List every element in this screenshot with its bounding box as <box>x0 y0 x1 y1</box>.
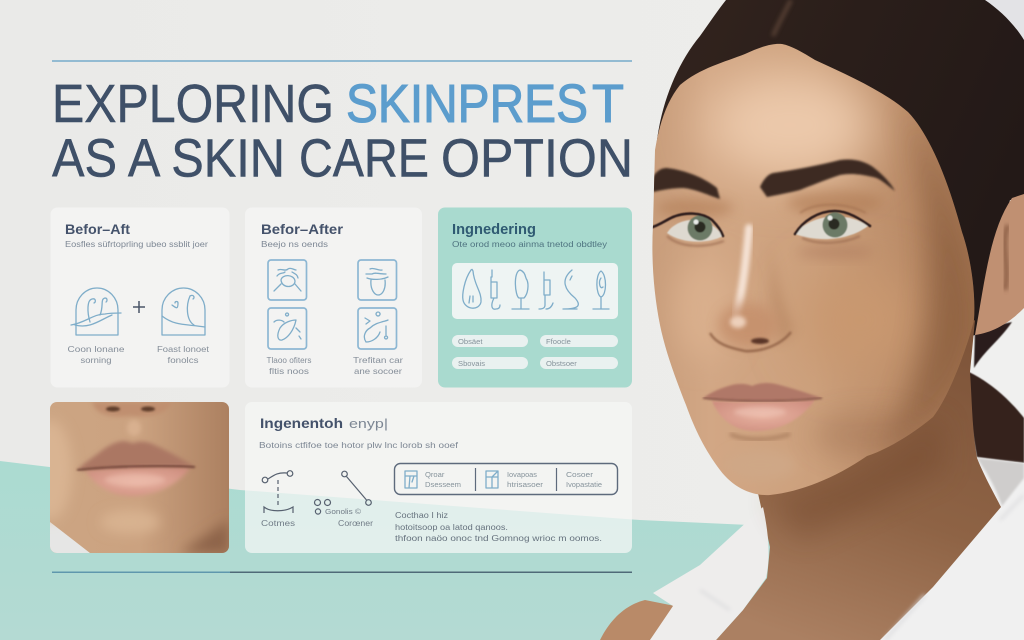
strip text 2 <box>507 470 544 489</box>
shirt back collar shade <box>977 458 1024 506</box>
ingredient pill 3 <box>452 357 528 369</box>
left eyebrow <box>650 168 720 199</box>
strip text 1: Dsesseem <box>425 480 461 489</box>
panel 3 heading: Ingnedering <box>452 221 536 238</box>
photo: lips close-up <box>50 402 229 553</box>
title: SKINPRES <box>346 75 588 134</box>
right cheek <box>818 299 912 342</box>
caption left: Coon lonane <box>68 344 125 354</box>
bottom rule <box>52 572 632 573</box>
panel 5 paragraph: Cocthao I hiz <box>395 510 448 520</box>
panel 5 subtitle: Botoins ctfifoe toe hotor plw lnc lorob sh ooef <box>259 440 459 450</box>
caption left: Tlaoo ofiters <box>266 355 312 365</box>
mouth <box>703 383 822 439</box>
outlined info strip <box>394 464 618 494</box>
title: AS A SKIN <box>52 130 285 188</box>
panel: ingredients <box>438 208 632 388</box>
right eye <box>795 205 870 243</box>
ear detail <box>1005 225 1008 290</box>
chin <box>724 449 796 481</box>
right eyebrow <box>760 159 895 197</box>
ingredient pill 1 <box>452 335 528 347</box>
strip text 3 <box>566 470 602 489</box>
panel 1 heading: Befor–Aft <box>65 221 130 237</box>
strip text 2: htrisasoer <box>507 480 544 489</box>
panel: ingredient summary <box>245 402 632 553</box>
hair under ear <box>974 322 1012 368</box>
diagram: left connector: Cotmes <box>261 518 295 528</box>
panel 2 heading: Befor–After <box>261 221 344 237</box>
title <box>52 75 633 188</box>
hair <box>655 0 1024 340</box>
panel: before-after 1 <box>50 208 230 388</box>
caption left: fltis noos <box>269 366 309 376</box>
temple shadow <box>887 137 974 446</box>
icon: bottom-right tile <box>358 308 396 349</box>
caption right: Foast lonoet <box>157 344 210 354</box>
eye socket shadow right <box>787 191 883 215</box>
strip icon 2 <box>486 471 498 488</box>
caption right <box>353 355 403 376</box>
forehead highlight <box>705 70 875 180</box>
title: OPTION <box>441 130 633 188</box>
strip text 1 <box>425 470 461 489</box>
neck shadow <box>770 415 945 540</box>
caption right: fonolcs <box>168 355 198 365</box>
nose bridge highlight <box>736 228 749 316</box>
ingredient pill 3: Sbovais <box>458 359 485 368</box>
strip icon 1 <box>405 471 417 488</box>
strip text 1: Qroar <box>425 470 445 479</box>
ingredient pill 4 <box>540 357 618 369</box>
ponytail <box>969 372 1024 463</box>
top right corner backdrop <box>985 0 1024 40</box>
panel 5 heading: Ingenentoh <box>260 415 343 431</box>
under eye shadow right <box>803 244 862 260</box>
caption left <box>68 344 125 365</box>
panel 5 paragraph: hotoitsoop oa latod qanoos. <box>395 522 508 532</box>
nose tip <box>710 303 791 351</box>
ingredient icon strip <box>452 263 618 319</box>
caption right: Trefitan car <box>353 355 403 365</box>
shoulder <box>600 600 675 640</box>
portrait photo <box>600 0 1024 640</box>
shirt base <box>850 458 1024 640</box>
caption right <box>157 344 210 365</box>
icon: skin arch right <box>162 288 205 335</box>
face <box>652 44 974 496</box>
right side backdrop <box>970 330 1024 460</box>
strip text 3: Ivopastatie <box>566 480 602 489</box>
icon: top-left tile <box>268 260 306 300</box>
diagram: right connector: Gonolis © <box>325 507 361 516</box>
left eye <box>650 214 724 246</box>
panel 2 subtitle: Beejo ns oends <box>261 239 328 249</box>
panel: before-after 2 <box>245 208 422 388</box>
ingredient pill 1: Obsäet <box>458 337 483 346</box>
ingredient pill 2: Ffoocle <box>546 337 571 346</box>
ingredient pill 4: Obstsoer <box>546 359 577 368</box>
panel 5 heading suffix: enyp| <box>349 416 388 431</box>
title: EXPLORING <box>52 75 334 134</box>
diagram: right connector <box>314 471 373 528</box>
collar fold shadows <box>700 495 1024 640</box>
ingredient pill 2 <box>540 335 618 347</box>
title: CARE <box>299 130 429 188</box>
caption left: sorning <box>80 355 112 365</box>
top rule <box>52 60 632 62</box>
diagram: left connector <box>261 471 295 528</box>
caption left <box>266 355 312 376</box>
strip text 2: Iovapoas <box>507 470 537 479</box>
strip text 3: Cosoer <box>566 470 594 479</box>
icon: top-right tile <box>358 260 396 300</box>
cheek light <box>680 281 712 340</box>
panel 5 paragraph: thfoon naöo onoc tnd Gomnog wrioc m oomos. <box>395 533 602 543</box>
icon: bottom-left tile <box>268 308 306 349</box>
jaw shade <box>814 412 903 458</box>
panel 3 subtitle: Ote orod meoo ainma tnetod obdtley <box>452 239 608 249</box>
eye socket shadow left <box>657 198 733 218</box>
teal wave background <box>0 461 770 640</box>
title: T <box>592 75 624 134</box>
ear <box>975 194 1024 335</box>
plus sign <box>133 301 145 313</box>
diagram: right connector: Corœner <box>338 518 373 528</box>
panel 5 paragraph <box>395 510 602 543</box>
icon: skin arch left <box>71 288 121 335</box>
nose side shadow <box>770 278 792 337</box>
shirt left collar <box>650 507 769 640</box>
panel 1 subtitle: Eosfles süfrtoprling ubeo ssblit joer <box>65 239 208 249</box>
caption right: ane socoer <box>354 366 402 376</box>
neck <box>716 320 1001 640</box>
hair part highlight <box>773 0 791 36</box>
